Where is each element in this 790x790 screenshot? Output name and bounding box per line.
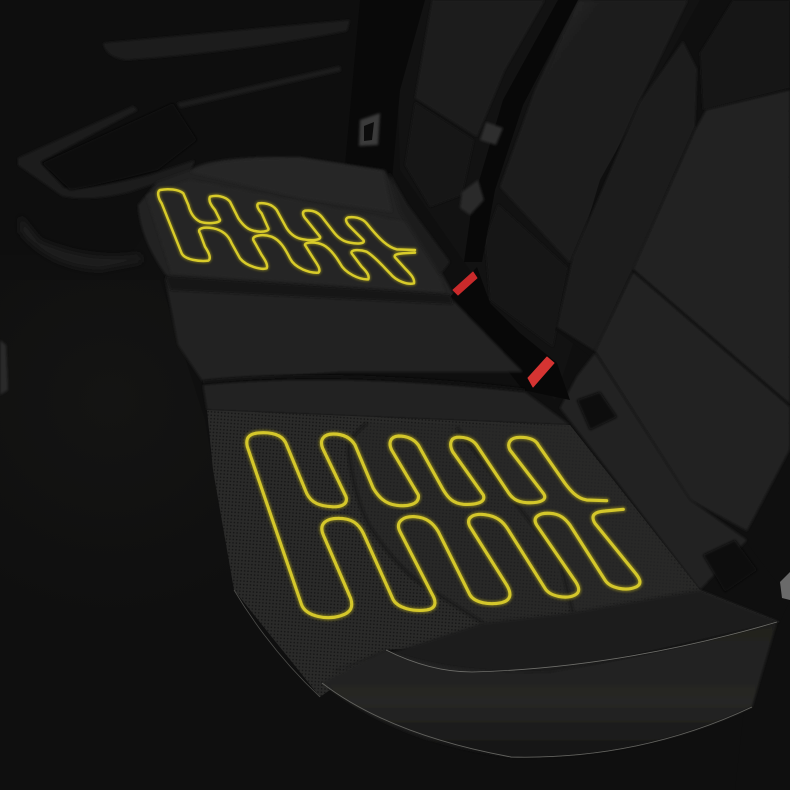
backrest: right [555, 0, 790, 790]
red buckle centre [528, 357, 554, 387]
red buckle rear [453, 272, 477, 295]
rear seat cushion [138, 157, 455, 297]
front bolster [234, 590, 777, 757]
front seat lip [203, 380, 570, 425]
floor carpet [0, 280, 430, 790]
seat belt [359, 0, 578, 262]
centre tunnel with buckles [165, 267, 570, 400]
heating coil: front seat [247, 433, 640, 618]
door panel [0, 0, 390, 270]
front seat cushion perforated panel [207, 410, 780, 697]
heating coil: rear seat [158, 189, 415, 284]
backrest: centre [345, 0, 700, 400]
